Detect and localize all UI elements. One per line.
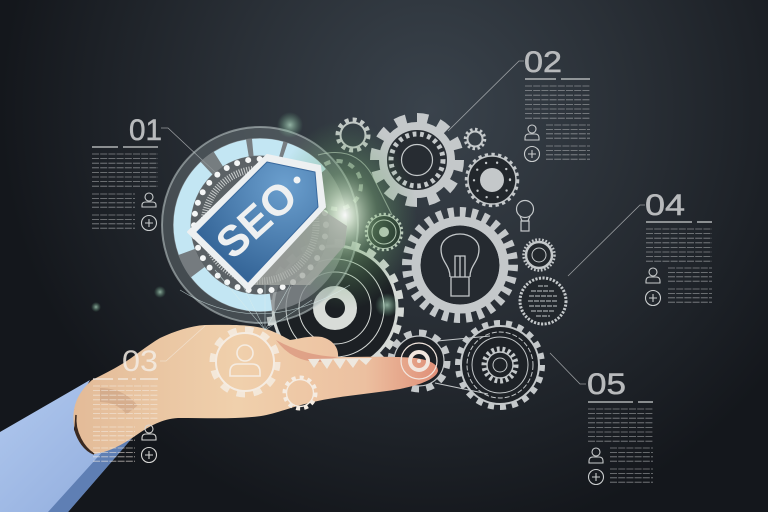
icon: plus	[524, 146, 540, 162]
leader line	[448, 61, 524, 131]
panel: 04	[568, 189, 712, 306]
gear teeth overlay on fingers	[308, 358, 372, 369]
icon: plus	[142, 448, 156, 462]
gear: small top	[338, 120, 368, 150]
text block	[646, 229, 712, 302]
text block	[525, 86, 590, 159]
gear: top large	[375, 118, 459, 202]
leader line	[160, 326, 205, 361]
gear: lower left	[391, 333, 447, 389]
gear: text disc right	[520, 278, 566, 324]
glow spots	[91, 112, 399, 317]
hand	[73, 325, 438, 454]
number 04: 04	[645, 189, 685, 222]
panel: 01	[92, 114, 215, 230]
icon: person	[142, 193, 156, 207]
gear: dotted hub	[466, 154, 518, 206]
number 01: 01	[129, 114, 162, 147]
heading rule	[525, 78, 590, 80]
sleeve	[0, 380, 133, 512]
leader line	[550, 353, 586, 384]
gear: large dark gear behind globe	[269, 242, 401, 374]
icon: plus	[142, 216, 156, 230]
gear: small ring right	[524, 240, 554, 270]
leader line	[568, 205, 645, 276]
text block	[588, 409, 653, 482]
gear: globe side	[366, 214, 402, 250]
globe	[162, 120, 417, 330]
segmented light blue ring	[182, 147, 338, 303]
heading rule	[93, 378, 158, 380]
globe side ghost gear	[313, 152, 392, 215]
heading rule	[92, 146, 158, 148]
icon: light bulb	[441, 234, 479, 296]
number 05: 05	[587, 368, 626, 401]
number 03: 03	[122, 345, 158, 378]
leader line	[161, 128, 215, 172]
heading rule	[588, 401, 653, 403]
text block	[92, 154, 158, 228]
gear: person on palm	[213, 330, 277, 394]
gear: lower right	[458, 323, 542, 407]
icon: plus	[646, 290, 660, 306]
SEO label: SEO	[207, 172, 307, 268]
icon: small bulb	[516, 200, 534, 231]
bottom net lines	[180, 270, 350, 330]
gear: tiny top right	[466, 130, 484, 148]
icon: person	[589, 448, 603, 463]
panel: 03	[93, 326, 205, 462]
belt between gears	[435, 336, 490, 394]
number 02: 02	[524, 46, 562, 79]
green glow	[273, 120, 417, 310]
gear overlay on fingertip	[401, 343, 437, 379]
heading rule	[646, 221, 712, 223]
SEO tag	[188, 155, 325, 290]
gear: main light bulb	[408, 213, 512, 317]
panel: 05	[550, 353, 653, 484]
tag shadow	[248, 207, 347, 285]
icon: person	[646, 268, 660, 283]
icon: plus	[588, 470, 604, 484]
panel: 02	[448, 46, 590, 162]
gear: small on palm	[284, 378, 316, 408]
text block	[93, 386, 158, 461]
dotted ring	[194, 159, 326, 291]
icon: person	[525, 125, 539, 140]
icon: person	[142, 425, 156, 440]
